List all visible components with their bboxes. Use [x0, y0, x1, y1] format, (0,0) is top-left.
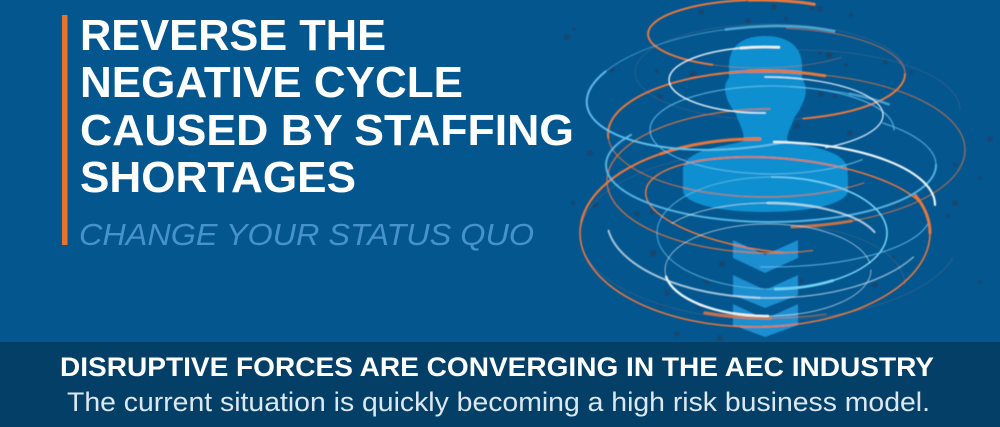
person silhouette: [683, 36, 848, 212]
swirling orange rings: [580, 0, 965, 327]
swirling light blue rings: [581, 12, 936, 289]
title: NEGATIVE CYCLE: [80, 59, 463, 107]
footer text: The current situation is quickly becoming a high risk business model.: [67, 387, 930, 417]
illustration: person in swirling rings: [564, 0, 993, 345]
subtitle: CHANGE YOUR STATUS QUO: [79, 217, 534, 252]
title: REVERSE THE: [80, 12, 386, 60]
accent bar: [62, 15, 68, 245]
footer band: [0, 342, 1000, 427]
title: SHORTAGES: [80, 154, 356, 202]
swirling white rings: [605, 47, 935, 316]
downward chevrons: [733, 240, 798, 337]
title: [80, 12, 574, 202]
title: CAUSED BY STAFFING: [80, 107, 574, 155]
footer heading: DISRUPTIVE FORCES ARE CONVERGING IN THE AEC INDUSTRY: [60, 352, 934, 382]
background speckles and faint rings: [564, 4, 993, 345]
